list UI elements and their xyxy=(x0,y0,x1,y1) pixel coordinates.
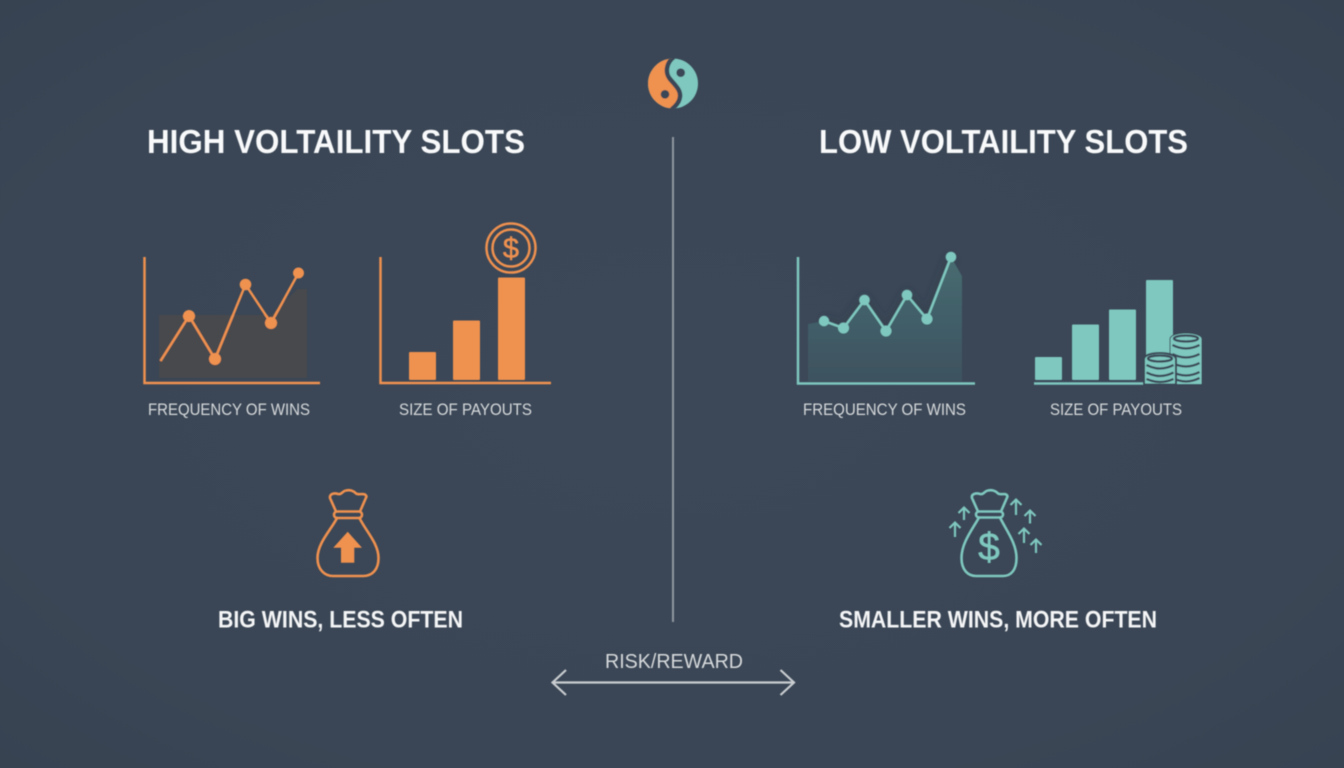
infographic canvas xyxy=(142,58,1202,696)
icon: coin stacks xyxy=(1144,333,1202,384)
label: frequency of wins (high): FREQUENCY OF WINS xyxy=(148,400,310,419)
heading: low volatility: LOW VOLTAILITY SLOTS xyxy=(819,123,1188,160)
label: risk/reward: RISK/REWARD xyxy=(605,651,743,673)
heading: high volatility: HIGH VOLTAILITY SLOTS xyxy=(147,123,525,160)
icon: dollar coin: $ xyxy=(503,233,519,265)
text: smaller wins, more often: SMALLER WINS, MORE OFTEN xyxy=(839,606,1157,634)
icon: yin-yang xyxy=(647,58,699,109)
icon: dollar coin xyxy=(486,224,536,272)
label: size of payouts (high): SIZE OF PAYOUTS xyxy=(399,400,532,419)
chart: low volatility frequency of wins xyxy=(798,252,975,384)
chart: high volatility size of payouts xyxy=(380,224,551,383)
icon: money bag with up arrow xyxy=(318,490,378,576)
center divider xyxy=(672,137,674,622)
text: big wins, less often: BIG WINS, LESS OFTEN xyxy=(218,606,463,634)
chart: low volatility size of payouts xyxy=(1034,280,1202,384)
label: size of payouts (low): SIZE OF PAYOUTS xyxy=(1050,400,1182,419)
icon: money bag with dollar and small arrows xyxy=(950,490,1042,576)
icon: money bag with dollar and small arrows: $ xyxy=(978,526,1000,569)
icon: small up arrows xyxy=(950,500,1042,553)
label: frequency of wins (low): FREQUENCY OF WINS xyxy=(803,400,966,419)
arrow: risk/reward double-headed xyxy=(552,670,794,695)
chart: high volatility frequency of wins xyxy=(144,257,320,383)
